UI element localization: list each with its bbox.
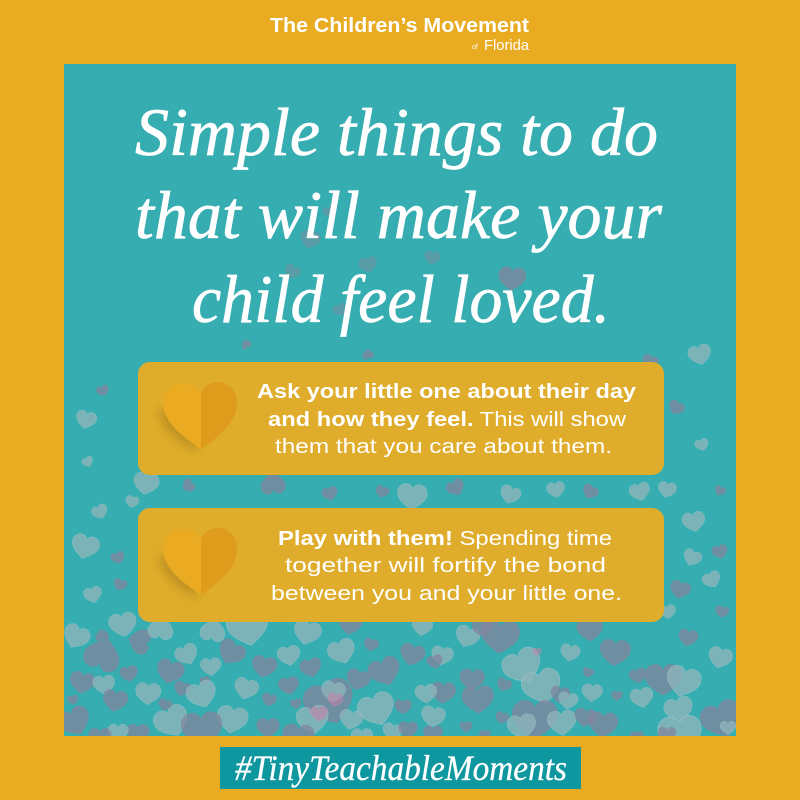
panel: tip card 1 <box>138 362 664 475</box>
text: tip 1: them that you care about them. <box>275 435 612 458</box>
title: child feel loved. <box>192 261 610 337</box>
logo: The Children's Movement of Florida: The Children’s Movement <box>270 14 529 37</box>
logo: The Children's Movement of Florida: of <box>472 44 478 51</box>
icon: folded heart 2 <box>159 528 237 598</box>
scattered hearts pattern <box>55 204 747 755</box>
panel: tip card 2 <box>138 508 664 622</box>
panel: teal background <box>64 64 736 736</box>
text: tip 2: together will fortify the bond <box>285 554 606 577</box>
text: tip 2 <box>271 527 622 605</box>
logo: The Children's Movement of Florida: Florida <box>484 37 530 54</box>
text: tip 1: Ask your little one about their day <box>257 380 637 403</box>
title: that will make your <box>135 177 663 253</box>
text: tip 2: Play with them! Spending time <box>278 527 612 550</box>
text: tip 1: and how they feel. This will show <box>268 408 626 431</box>
hashtag banner: #TinyTeachableMoments <box>235 748 567 788</box>
title: Simple things to do <box>135 94 658 170</box>
title <box>135 94 663 337</box>
icon: folded heart 1 <box>159 382 237 452</box>
text: tip 2: between you and your little one. <box>271 582 622 605</box>
logo: The Children's Movement of Florida <box>270 14 530 54</box>
text: tip 1 <box>257 380 637 458</box>
